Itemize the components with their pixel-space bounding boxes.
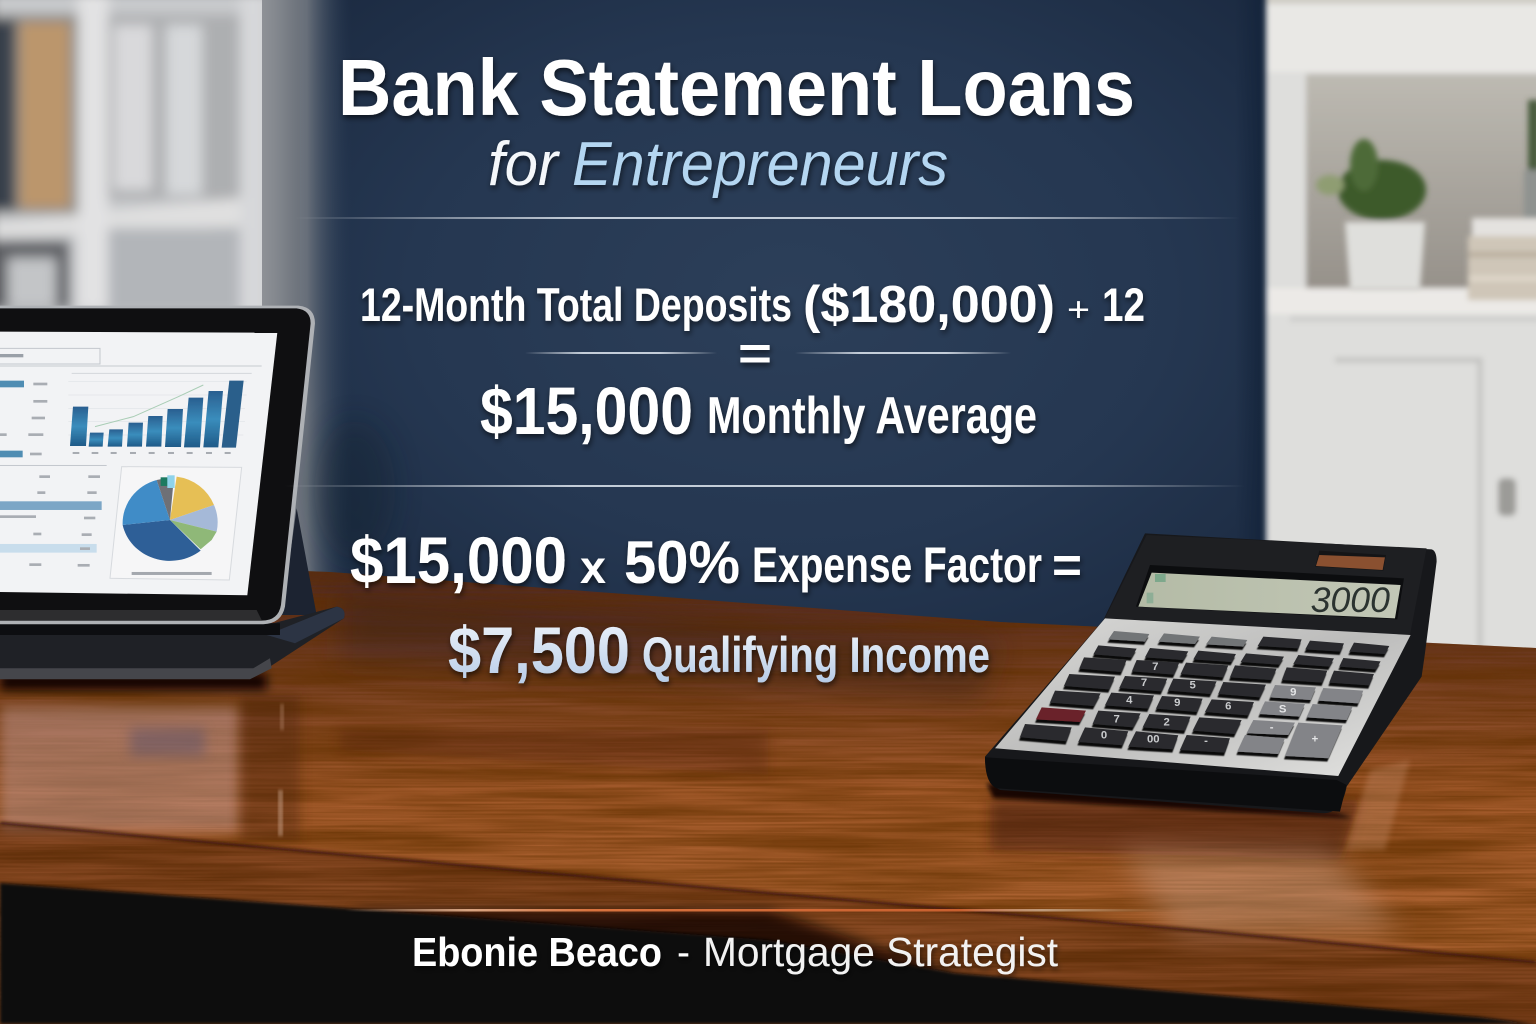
key legends: - — [1204, 735, 1208, 747]
key legends: 7 — [1113, 714, 1120, 726]
dashboard table rows — [0, 381, 107, 567]
calculator body — [985, 533, 1437, 813]
bar chart — [68, 381, 247, 454]
deposits line: ($180,000) — [803, 276, 1055, 334]
expense factor line: $15,000 — [350, 523, 567, 597]
background: office wall — [0, 0, 1536, 660]
keypad plate — [995, 618, 1411, 776]
qualifying income result: Qualifying Income — [642, 627, 990, 683]
monthly average result: Monthly Average — [707, 387, 1037, 445]
plant in pot — [1316, 100, 1536, 290]
key legends — [1101, 661, 1319, 747]
pie chart — [110, 467, 242, 580]
gray function keys — [1108, 631, 1247, 647]
expense factor line: x — [580, 541, 606, 593]
key legends: 6 — [1225, 700, 1231, 712]
red key — [1036, 707, 1086, 722]
qualifying income result: $7,500 — [448, 613, 630, 687]
key legends: 0 — [1101, 729, 1107, 741]
expense factor line: Expense Factor — [752, 537, 1042, 593]
key legends: 4 — [1126, 694, 1133, 706]
shadow under desk — [350, 910, 960, 980]
deposits line: 12-Month Total Deposits — [360, 278, 792, 331]
wood grain — [0, 560, 1536, 1024]
blurred right shelving and cabinet — [1266, 0, 1536, 660]
deposits line: 12 — [1102, 278, 1145, 331]
expense factor line: = — [1052, 537, 1082, 593]
divider under formula — [285, 485, 1245, 487]
solar panel — [1315, 551, 1386, 571]
footer credit: Mortgage Strategist — [703, 929, 1059, 975]
calculator shadow — [987, 783, 1353, 818]
tablet stand — [0, 508, 345, 690]
deposits line — [360, 276, 1145, 334]
key legends: 9 — [1290, 686, 1296, 698]
footer credit: - — [677, 929, 690, 975]
wooden desk — [0, 560, 1536, 1024]
gray arithmetic keys — [1237, 685, 1363, 758]
key legends: 9 — [1174, 697, 1180, 709]
keypad keys — [1020, 631, 1389, 758]
deposits line: + — [1067, 291, 1090, 329]
desk front edge — [0, 823, 1536, 1024]
key legends: S — [1279, 704, 1287, 716]
monthly average result: $15,000 — [480, 374, 693, 449]
key legends: 7 — [1141, 677, 1147, 689]
footer credit: Ebonie Beaco — [412, 929, 662, 975]
title — [338, 43, 1135, 199]
dark shadow beside tablet — [315, 420, 395, 560]
key legends: 7 — [1152, 661, 1158, 673]
LCD display — [1136, 565, 1404, 620]
key legends: + — [1312, 734, 1319, 746]
footer divider — [345, 909, 1165, 912]
top row keys — [1020, 637, 1389, 753]
tablet frame — [0, 306, 315, 624]
divider under title — [295, 217, 1240, 219]
navy backdrop panel — [300, 0, 1280, 660]
formula: monthly average — [360, 276, 1145, 449]
qualifying income result — [448, 613, 990, 687]
monthly average result — [480, 374, 1037, 449]
key legends: 2 — [1163, 716, 1170, 728]
equals sign: = — [738, 327, 772, 379]
expense factor line — [350, 523, 1082, 597]
tablet screen — [0, 332, 277, 595]
tablet with dashboard — [0, 306, 345, 690]
desk reflections — [0, 590, 1410, 940]
LCD display: 3000 — [1311, 581, 1390, 620]
formula: qualifying income — [350, 523, 1082, 687]
stacked books — [1468, 218, 1536, 300]
title line 2: for — [488, 130, 560, 199]
title accent word: Entrepreneurs — [572, 130, 948, 199]
footer credit — [412, 929, 1059, 975]
title line 1: Bank Statement Loans — [338, 43, 1135, 132]
calculator — [985, 533, 1437, 818]
key legends: 5 — [1189, 680, 1196, 692]
key legends: 00 — [1147, 734, 1160, 746]
key legends: - — [1270, 722, 1274, 734]
expense factor line: 50% — [624, 529, 740, 596]
blurred left bookshelf — [0, 0, 280, 630]
